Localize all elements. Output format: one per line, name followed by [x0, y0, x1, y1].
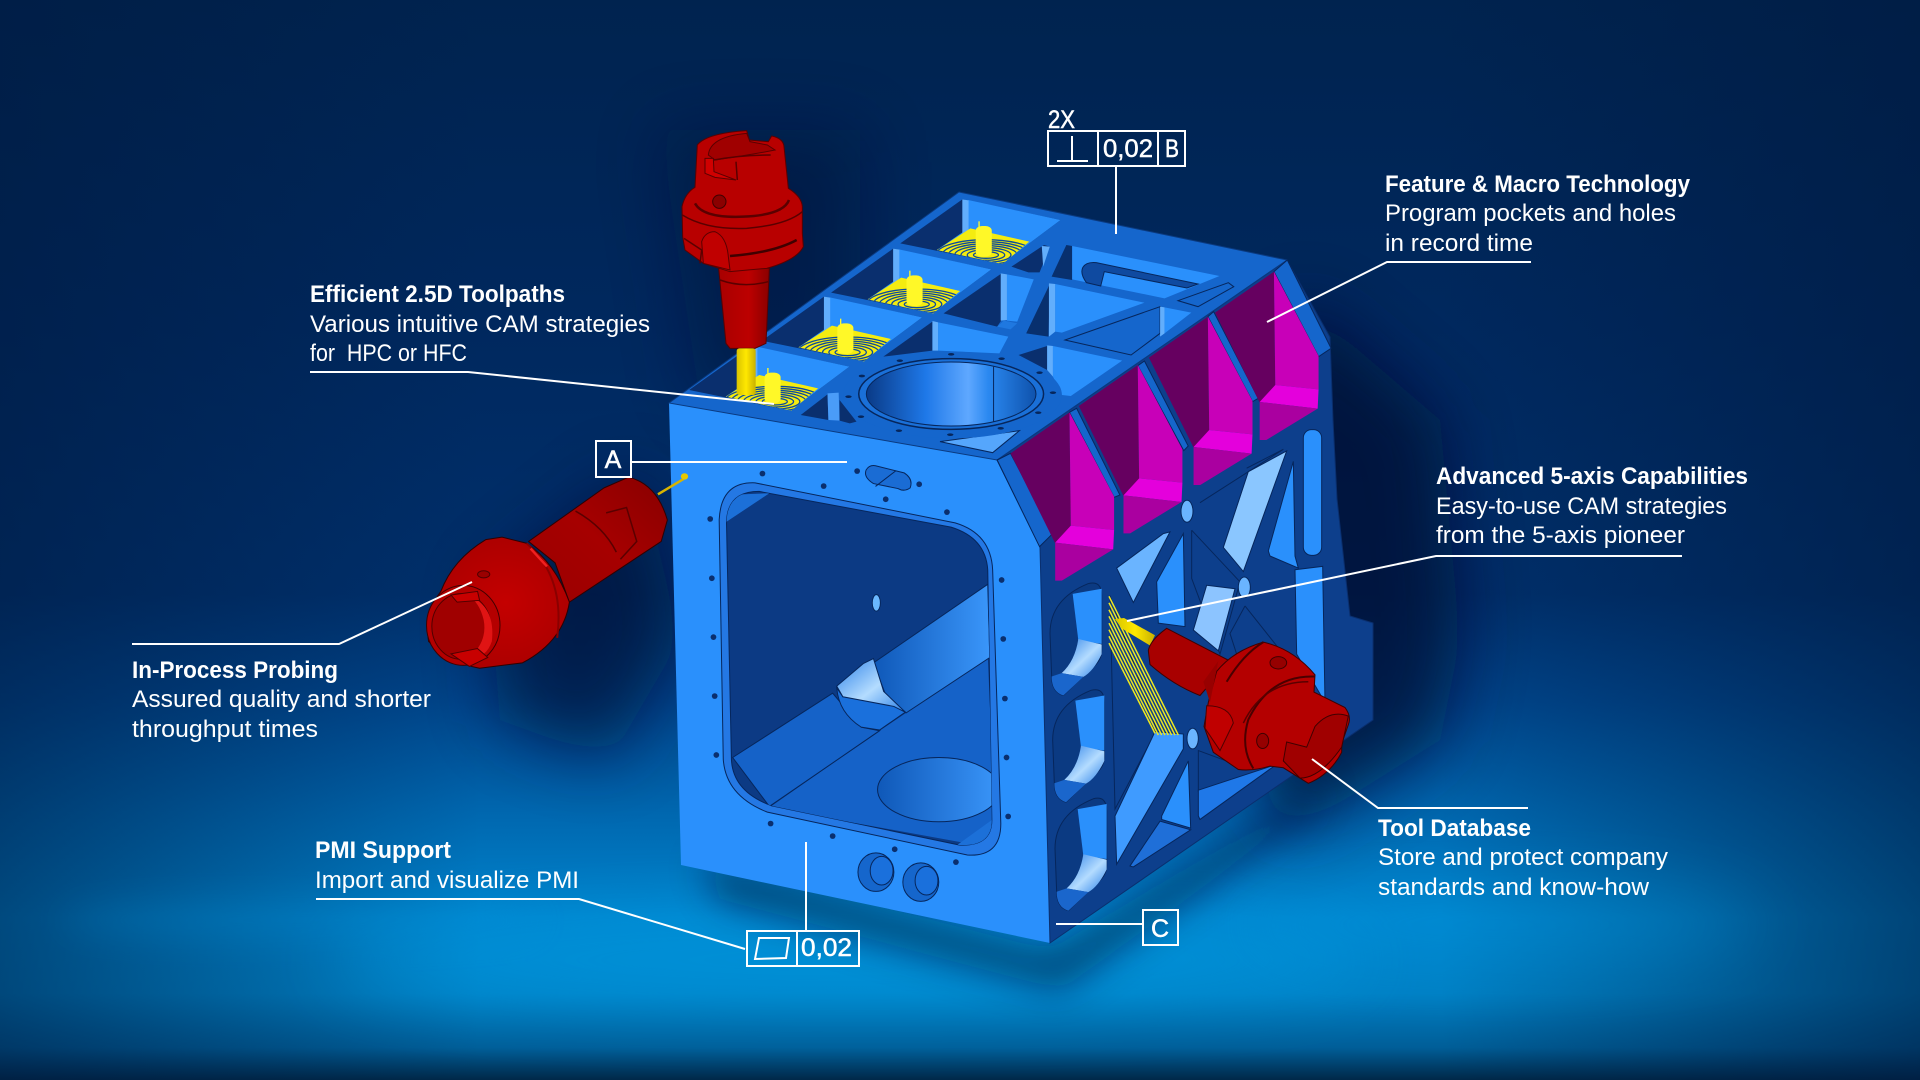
- callout: Feature & Macro Technology: Feature & Macro Technology: [1385, 171, 1691, 198]
- top red tool holder: [682, 131, 803, 395]
- callout: Efficient 2.5D Toolpaths: [310, 281, 774, 404]
- front window opening: [707, 466, 1011, 901]
- right side face: [997, 260, 1373, 943]
- side pocket 2: [1053, 690, 1104, 802]
- callout: In-Process Probing: Assured quality and shorter: [132, 686, 431, 713]
- datum label A: [596, 441, 847, 477]
- magenta pocket 2: [1079, 365, 1182, 533]
- diagonal rib windows: [1115, 430, 1325, 867]
- callout: In-Process Probing: In-Process Probing: [132, 657, 338, 684]
- front face bolt holes: [707, 468, 1011, 865]
- datum label C: [1056, 910, 1178, 945]
- oblong slot: [865, 466, 911, 490]
- callout: Tool Database: Store and protect company: [1378, 844, 1668, 871]
- two round ports: [858, 853, 939, 901]
- chamfer ribs: [997, 260, 1331, 547]
- drop shadows: [490, 130, 1460, 990]
- chamfer ribs and magenta pockets: [997, 260, 1331, 581]
- right red tool holder: [1115, 618, 1349, 783]
- central bore: [843, 352, 1062, 438]
- callout: In-Process Probing: throughput times: [132, 716, 318, 743]
- magenta pocket 4: [1215, 272, 1319, 440]
- callout: Feature & Macro Technology: in record time: [1385, 230, 1533, 257]
- callout: Tool Database: standards and know-how: [1378, 874, 1650, 901]
- callout: PMI Support: [315, 837, 745, 949]
- callout: PMI Support: PMI Support: [315, 837, 451, 864]
- front face: [669, 403, 1050, 943]
- side pocket 3: [1055, 798, 1107, 911]
- callout: Efficient 2.5D Toolpaths: Efficient 2.5D Toolpaths: [310, 281, 565, 308]
- milling pocket 2 with yellow toolpath: [831, 249, 991, 320]
- milling pocket 1 with yellow toolpath: [900, 199, 1061, 270]
- magenta pocket 3: [1149, 317, 1253, 485]
- callout: Advanced 5-axis Capabilities: [1127, 463, 1748, 621]
- flatness control frame 0,02: [747, 842, 859, 966]
- flatness control frame 0,02: 0,02: [801, 934, 852, 962]
- perpendicularity control frame 2X 0,02 B: [1048, 106, 1185, 234]
- top face pockets: [689, 199, 1234, 453]
- milling pocket 4 with yellow toolpath: [689, 347, 849, 411]
- datum label A: A: [605, 446, 622, 474]
- perpendicularity control frame 2X 0,02 B: 0,02: [1103, 135, 1153, 163]
- left red probing holder: [427, 473, 688, 668]
- rib recess outlines: [1110, 449, 1283, 809]
- perpendicularity control frame 2X 0,02 B: B: [1165, 135, 1179, 163]
- callout: Efficient 2.5D Toolpaths: for HPC or HFC: [310, 340, 467, 367]
- callout: In-Process Probing: [132, 582, 472, 743]
- milling pocket 3 with yellow toolpath: [766, 296, 922, 362]
- callout: Efficient 2.5D Toolpaths: Various intuitive CAM strategies: [310, 311, 650, 338]
- top face: [669, 192, 1287, 460]
- callout: Feature & Macro Technology: Program pockets and holes: [1385, 200, 1676, 227]
- callout: Tool Database: Tool Database: [1378, 815, 1531, 842]
- yellow 5-axis toolpath: [1109, 596, 1178, 735]
- callout: Advanced 5-axis Capabilities: Easy-to-use CAM strategies: [1436, 493, 1727, 520]
- side pocket 1: [1050, 583, 1102, 695]
- callout: PMI Support: Import and visualize PMI: [315, 867, 579, 894]
- callout: Tool Database: [1312, 759, 1668, 901]
- rib pockets on top face: [801, 245, 1234, 453]
- callout: Feature & Macro Technology: [1267, 171, 1691, 322]
- datum label C: C: [1151, 915, 1169, 943]
- callout: Advanced 5-axis Capabilities: Advanced 5-axis Capabilities: [1436, 463, 1748, 490]
- side face ribbed windows: [1050, 430, 1325, 911]
- callout: Advanced 5-axis Capabilities: from the 5-axis pioneer: [1436, 522, 1685, 549]
- magenta pocket 1: [1011, 412, 1114, 581]
- perpendicularity control frame 2X 0,02 B: 2X: [1048, 106, 1075, 134]
- machined block: [427, 131, 1373, 943]
